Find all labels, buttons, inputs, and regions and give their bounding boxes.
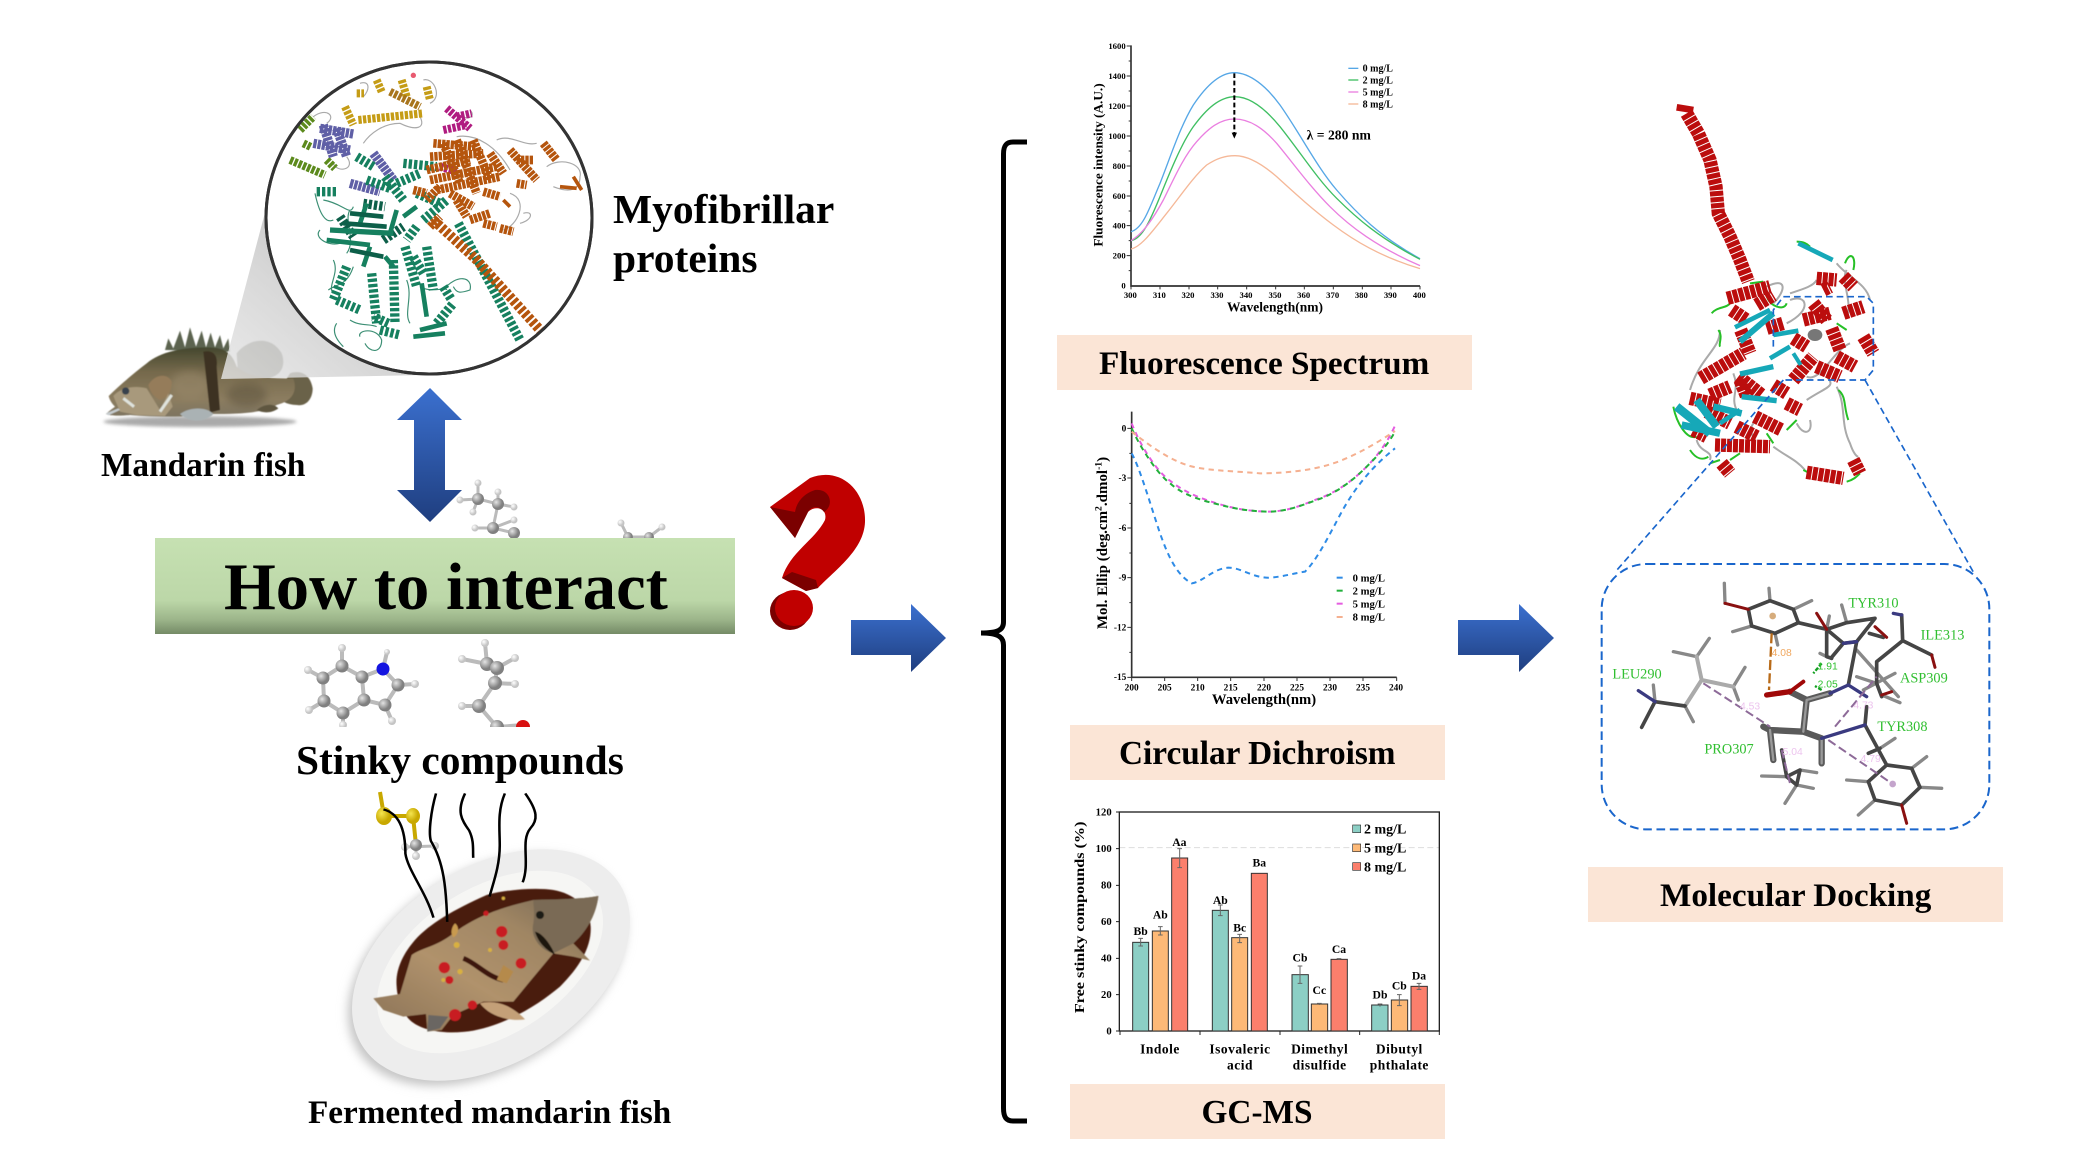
- chart: circular dichroism: .dmol: [1095, 470, 1111, 506]
- icon: mandarin fish: [103, 327, 313, 427]
- curves: [1132, 423, 1396, 583]
- chart: fluorescence spectrum: 370: [1326, 290, 1339, 300]
- chart: GC-MS bars: 20: [1101, 990, 1112, 1001]
- legend: 5 mg/L: [1353, 599, 1385, 610]
- chart: circular dichroism: 200: [1125, 683, 1139, 693]
- significance letters: Ca: [1332, 943, 1346, 956]
- chart: circular dichroism: 2: [1094, 506, 1105, 511]
- distances: 5.04: [1783, 747, 1803, 758]
- chart: fluorescence spectrum: 320: [1182, 290, 1194, 300]
- distances: 4.73: [1853, 700, 1874, 711]
- label: GC-MS: [1070, 1084, 1445, 1139]
- chart: GC-MS bars: 60: [1101, 917, 1112, 928]
- legend: 2 mg/L: [1363, 75, 1393, 86]
- legend: 5 mg/L: [1363, 87, 1393, 98]
- categories: Isovaleric: [1209, 1041, 1271, 1056]
- olive chain: [290, 117, 335, 175]
- chart: GC-MS bars: 120: [1096, 807, 1112, 818]
- label: Circular Dichroism: [1070, 725, 1445, 780]
- chart: circular dichroism: 225: [1290, 683, 1304, 693]
- chart: circular dichroism: -15: [1114, 673, 1127, 683]
- significance letters: Ab: [1153, 909, 1168, 922]
- chart: circular dichroism: -9: [1119, 574, 1127, 584]
- thin sticks: [1653, 583, 1942, 815]
- chart: circular dichroism: -1: [1094, 462, 1105, 470]
- protein ribbon structure: [1617, 107, 1975, 575]
- categories: [1140, 1041, 1429, 1073]
- chart: fluorescence spectrum: 390: [1384, 290, 1397, 300]
- chart: fluorescence spectrum: 300: [1124, 290, 1137, 300]
- categories: disulfide: [1293, 1058, 1347, 1073]
- chart: fluorescence spectrum: 310: [1153, 290, 1166, 300]
- arrow: to analyses: [851, 604, 946, 672]
- icon: red question mark: [770, 475, 865, 630]
- bars: [1133, 858, 1427, 1031]
- chart: GC-MS bars: 40: [1101, 954, 1112, 965]
- green chain: [317, 157, 520, 340]
- label: Stinky compounds: [290, 727, 640, 792]
- chart: fluorescence spectrum: 340: [1240, 290, 1252, 300]
- magnification cone: [221, 205, 425, 379]
- chart: fluorescence spectrum: 800: [1113, 161, 1126, 171]
- red helices: [1677, 107, 1873, 478]
- chart: circular dichroism: 220: [1257, 683, 1271, 693]
- chart: fluorescence spectrum: λ = 280 nm: [1307, 127, 1371, 142]
- chart: fluorescence spectrum: 1400: [1108, 71, 1126, 81]
- distances: 4.08: [1772, 648, 1792, 659]
- chart: circular dichroism: Mol. Ellip (deg.cm: [1095, 511, 1111, 629]
- chart: circular dichroism: 210: [1191, 683, 1205, 693]
- legend: 0 mg/L: [1353, 573, 1385, 584]
- distances: 2.05: [1818, 680, 1838, 691]
- residue labels: [1612, 595, 1964, 758]
- arrow: decreasing trend: [1232, 73, 1237, 139]
- curves: [1131, 73, 1420, 269]
- residue labels: ASP309: [1900, 671, 1948, 687]
- legend: 8 mg/L: [1353, 613, 1385, 624]
- chart: circular dichroism: -3: [1119, 474, 1127, 484]
- chart: circular dichroism: ): [1095, 457, 1111, 462]
- categories: Indole: [1140, 1041, 1180, 1056]
- chart: GC-MS bars: 100: [1096, 844, 1112, 855]
- significance letters: Cc: [1313, 984, 1326, 997]
- chart: circular dichroism: 205: [1158, 683, 1172, 693]
- significance letters: Da: [1412, 970, 1426, 983]
- chart: fluorescence spectrum: 360: [1297, 290, 1310, 300]
- chart: circular dichroism: 235: [1356, 683, 1370, 693]
- distances: 4.79: [1861, 754, 1881, 765]
- molecule: isovaleric acid: [458, 639, 530, 734]
- molecules above banner: [456, 480, 666, 542]
- interaction dashes: [1769, 633, 1772, 690]
- label: Fermented mandarin fish: Fermented mandarin fish: [308, 1094, 671, 1131]
- chart: circular dichroism: [1094, 412, 1403, 708]
- chart: fluorescence spectrum: 200: [1113, 251, 1126, 261]
- significance letters: Db: [1373, 988, 1388, 1001]
- residue labels: TYR308: [1877, 719, 1927, 735]
- stink lines: [383, 793, 536, 922]
- label: Stinky compounds: Stinky compounds: [296, 737, 624, 783]
- chart: fluorescence spectrum: 1200: [1108, 101, 1126, 111]
- label: Fluorescence Spectrum: [1057, 335, 1472, 390]
- label: GC-MS: GC-MS: [1202, 1094, 1312, 1131]
- distances: [1740, 648, 1881, 765]
- chart: GC-MS bars: Free stinky compounds (%): [1073, 821, 1088, 1013]
- significance letters: Aa: [1172, 836, 1187, 849]
- residue labels: ILE313: [1921, 627, 1964, 643]
- legend: [1348, 64, 1393, 110]
- chart: fluorescence spectrum: Wavelength(nm): [1227, 300, 1323, 315]
- double arrow: [397, 388, 462, 522]
- label: Mandarin fish: Mandarin fish: [101, 447, 306, 484]
- chart: fluorescence spectrum: Fluorescence intensity (A.U.): [1092, 83, 1106, 247]
- chart: circular dichroism: -12: [1114, 623, 1127, 633]
- chart: fluorescence spectrum: 400: [1113, 221, 1126, 231]
- grey loops: [1690, 263, 1870, 470]
- chart: fluorescence spectrum: [1092, 41, 1426, 315]
- thick sticks: [1638, 603, 1935, 823]
- residue labels: PRO307: [1704, 742, 1754, 758]
- heading: Myofibrillar proteins: proteins: [613, 235, 758, 281]
- distances: 4.53: [1740, 701, 1760, 712]
- chart: fluorescence spectrum: 600: [1113, 191, 1126, 201]
- banner: How to interact: [155, 538, 735, 634]
- chart: fluorescence spectrum: 1000: [1108, 131, 1126, 141]
- categories: Dibutyl: [1376, 1041, 1423, 1056]
- legend: 8 mg/L: [1363, 99, 1393, 110]
- banner: How to interact: How to interact: [224, 551, 668, 624]
- chart: circular dichroism: Wavelength(nm): [1212, 692, 1316, 708]
- chart: fluorescence spectrum: 350: [1269, 290, 1281, 300]
- residue labels: TYR310: [1848, 595, 1898, 611]
- categories: acid: [1227, 1058, 1253, 1073]
- chart: GC-MS bars: 80: [1101, 881, 1112, 892]
- gold chain: [345, 80, 430, 125]
- blue selection box and guide lines: [1617, 297, 1975, 575]
- cyan sheets: [1677, 243, 1833, 433]
- chart: circular dichroism: 240: [1389, 683, 1403, 693]
- distances: 1.91: [1818, 661, 1838, 672]
- thin loops: [313, 80, 580, 230]
- chart: fluorescence spectrum: 380: [1355, 290, 1368, 300]
- significance letters: Bc: [1233, 922, 1246, 935]
- chart: fluorescence spectrum: 330: [1211, 290, 1223, 300]
- magnifier circle: myofibrillar protein ribbon structure: [266, 62, 592, 374]
- legend: 8 mg/L: [1364, 860, 1406, 875]
- categories: phthalate: [1370, 1058, 1429, 1073]
- icon: fermented fish on plate: [306, 801, 672, 1134]
- chart: circular dichroism: 215: [1224, 683, 1238, 693]
- chart: circular dichroism: 230: [1323, 683, 1337, 693]
- legend: 2 mg/L: [1364, 823, 1406, 838]
- significance letters: Ab: [1213, 894, 1228, 907]
- green loops: [1673, 242, 1860, 482]
- legend: 2 mg/L: [1353, 586, 1385, 597]
- heading: Myofibrillar proteins: [613, 186, 834, 281]
- arrow: to docking: [1458, 604, 1554, 672]
- residue labels: LEU290: [1612, 666, 1662, 682]
- heading: Myofibrillar proteins: Myofibrillar: [613, 186, 834, 232]
- chart: fluorescence spectrum: 400: [1413, 290, 1426, 300]
- docking panel: [1602, 564, 1989, 829]
- legend: [1337, 573, 1385, 624]
- label: Circular Dichroism: Circular Dichroism: [1119, 735, 1396, 772]
- chart: fluorescence spectrum: 0: [1121, 281, 1126, 291]
- legend: 0 mg/L: [1363, 64, 1393, 75]
- molecule: indole: [304, 644, 419, 729]
- curly brace: [981, 142, 1027, 1121]
- magenta chain: [440, 108, 472, 172]
- label: Molecular Docking: Molecular Docking: [1660, 877, 1932, 914]
- dark sticks: [1642, 601, 1932, 805]
- significance letters: Ba: [1253, 857, 1266, 870]
- chart: fluorescence spectrum: 1600: [1108, 41, 1126, 51]
- chart: circular dichroism: 0: [1122, 424, 1127, 434]
- legend: [1353, 823, 1406, 875]
- molecule: dimethyl disulfide: [376, 792, 439, 860]
- significance letters: Bb: [1134, 925, 1148, 938]
- error bars: [1138, 849, 1421, 1007]
- significance letters: Cb: [1293, 952, 1308, 965]
- chart: circular dichroism: -6: [1119, 524, 1127, 534]
- chart: GC-MS bars: 0: [1106, 1026, 1112, 1037]
- legend: 5 mg/L: [1364, 842, 1406, 857]
- orange chain: [413, 140, 557, 330]
- purple chain: [313, 125, 393, 192]
- significance letters: Cb: [1392, 980, 1407, 993]
- ligand: [1808, 329, 1822, 341]
- significance letters: [1134, 836, 1426, 1001]
- categories: Dimethyl: [1291, 1041, 1348, 1056]
- label: Molecular Docking: [1588, 867, 2003, 922]
- chart: GC-MS bars: [1073, 807, 1439, 1073]
- label: Fluorescence Spectrum: Fluorescence Spectrum: [1099, 345, 1430, 382]
